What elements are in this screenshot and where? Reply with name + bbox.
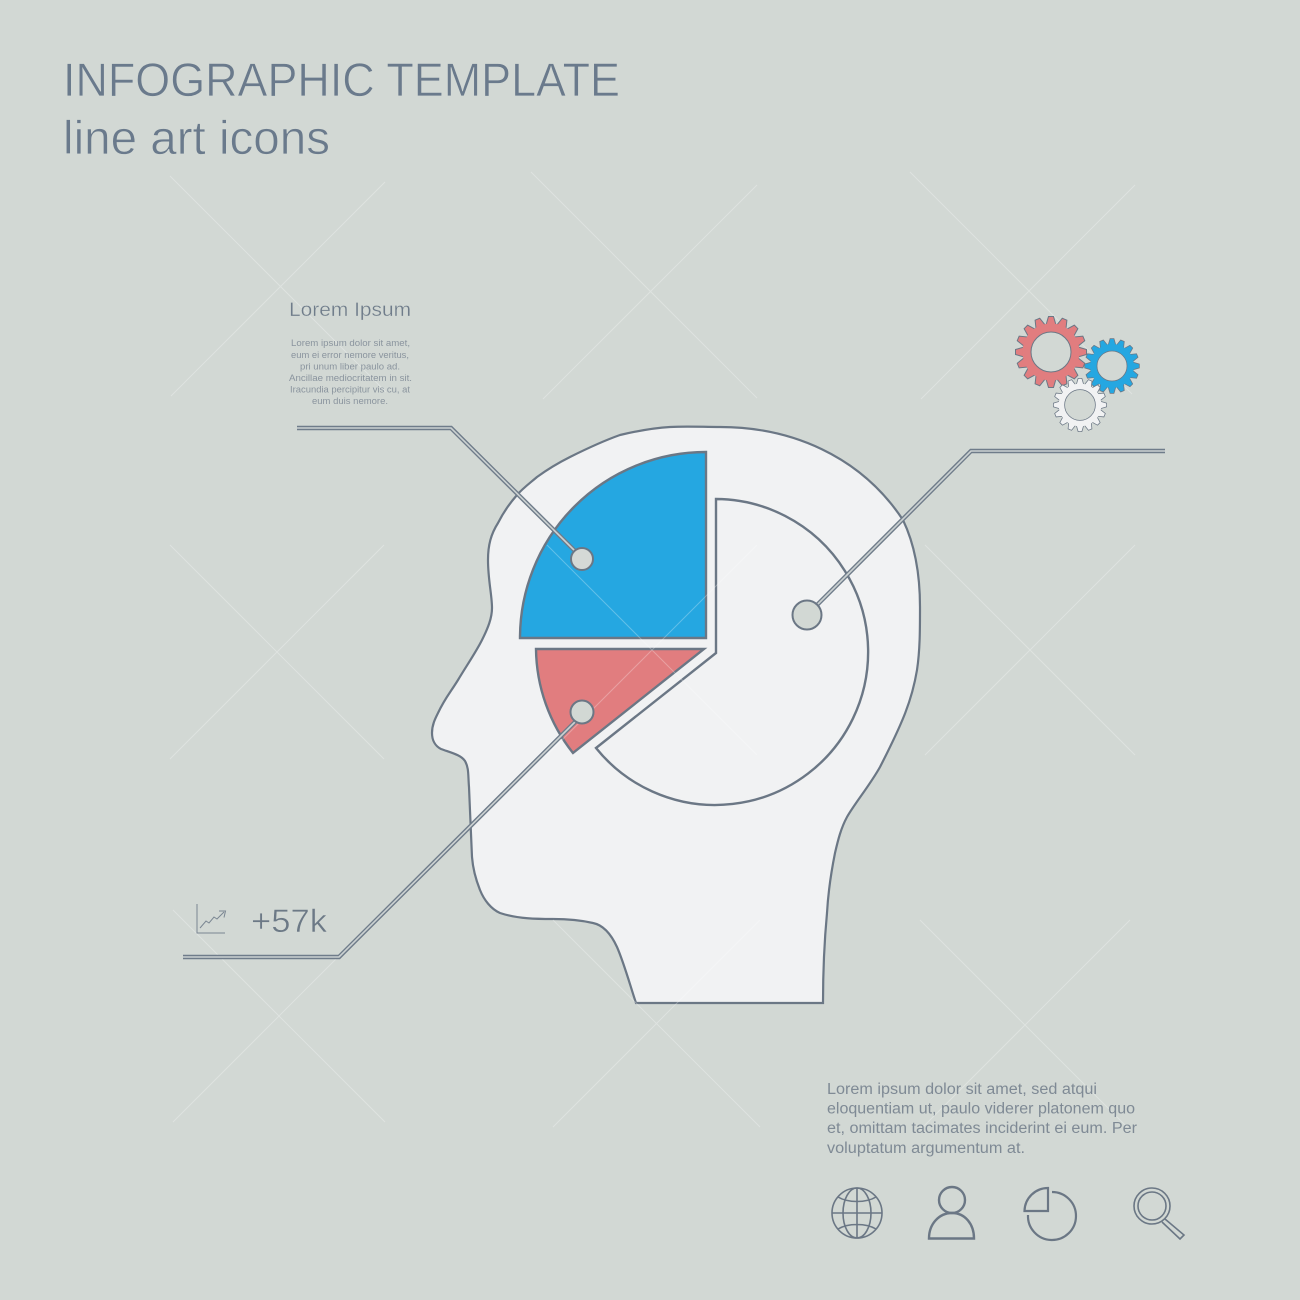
pie slice: large remainder: [596, 499, 868, 805]
callout body: Lorem ipsum dolor sit amet,: [291, 338, 410, 348]
text block: footer paragraph: et, omittam tacimates inciderint ei eum. Per: [827, 1120, 1137, 1137]
callout body: eum ei error nemore veritus,: [291, 350, 409, 360]
icon: magnifier: [1134, 1188, 1184, 1239]
title: INFOGRAPHIC TEMPLATE: [63, 53, 620, 106]
pie slice: blue quarter: [520, 452, 706, 638]
text block: Lorem Ipsum callout: [289, 300, 412, 406]
text block: footer paragraph: voluptatum argumentum at.: [827, 1140, 1025, 1157]
icon: globe: [832, 1188, 882, 1238]
icon: growth chart: [197, 904, 226, 933]
callout body: pri unum liber paulo ad.: [300, 362, 400, 372]
callout body: Iracundia percipitur vis cu, at: [290, 384, 411, 394]
leader line: blue slice: [297, 428, 593, 570]
callout body: Ancillae mediocritatem in sit.: [289, 373, 412, 383]
pie chart: [520, 452, 868, 805]
gear: blue: [1073, 327, 1151, 405]
icon: gears: [1001, 302, 1151, 443]
gear: red: [1001, 302, 1101, 402]
stat: +57k: +57k: [251, 903, 328, 939]
icon: person: [929, 1187, 974, 1238]
head silhouette: [432, 427, 920, 1003]
text block: footer paragraph: eloquentiam ut, paulo viderer platonem quo: [827, 1100, 1135, 1118]
title: [63, 53, 620, 164]
text block: footer paragraph: Lorem ipsum dolor sit amet, sed atqui: [827, 1081, 1097, 1098]
text block: footer paragraph: [827, 1081, 1137, 1157]
callout body: eum duis nemore.: [312, 396, 388, 406]
pie slice: red wedge: [536, 649, 704, 753]
leader line: red slice: [183, 700, 594, 957]
icon: pie chart: [1024, 1188, 1076, 1240]
callout body: [289, 338, 412, 406]
gear: white: [1042, 367, 1118, 443]
callout heading: Lorem Ipsum: [289, 300, 411, 321]
title: line art icons: [63, 111, 330, 164]
leader line: large slice: [792, 451, 1165, 630]
